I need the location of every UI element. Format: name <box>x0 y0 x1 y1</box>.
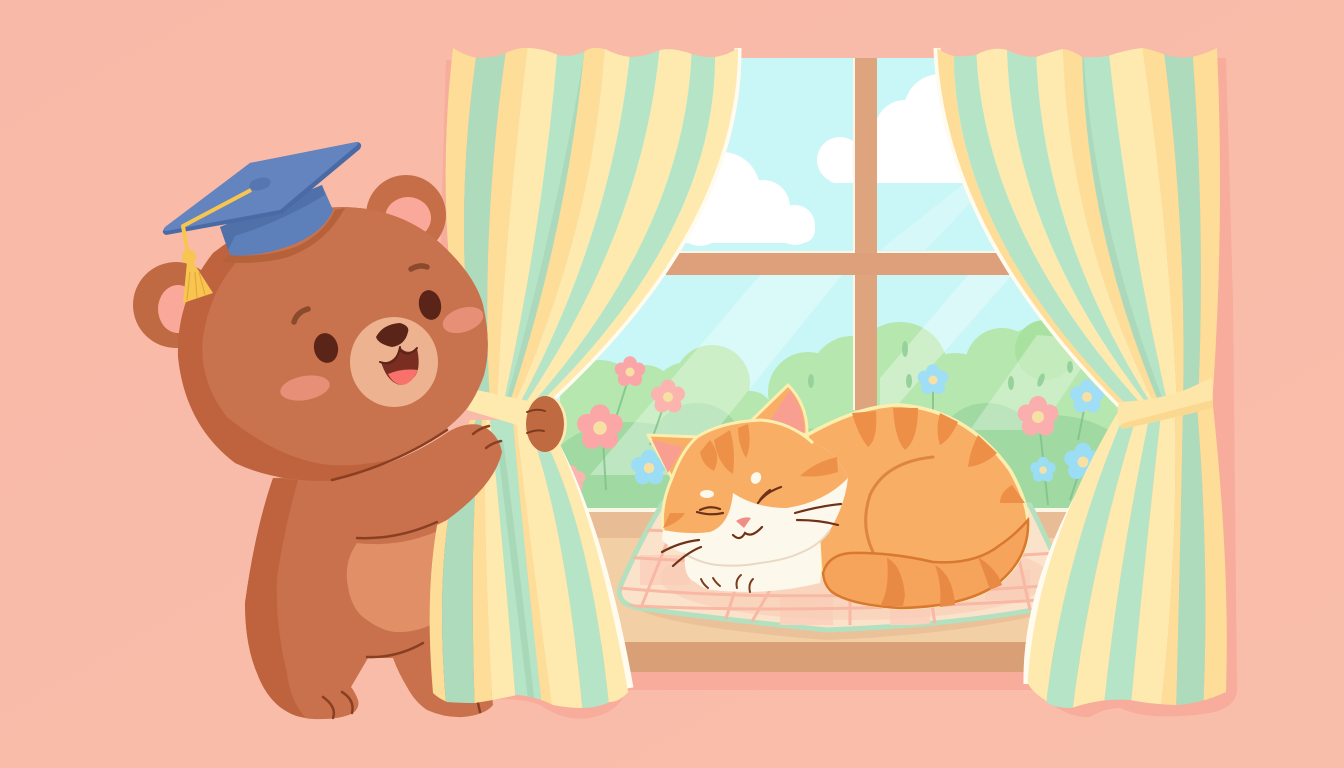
tassel <box>182 190 251 303</box>
cap base <box>220 185 333 256</box>
forehead spots <box>700 470 763 498</box>
right curtain lower <box>1027 405 1230 715</box>
arm <box>332 424 502 540</box>
cat eyes, nose, mouth, whiskers <box>662 487 841 566</box>
cat body <box>807 405 1028 608</box>
right ear <box>366 175 446 255</box>
head highlight <box>202 207 488 465</box>
tummy <box>347 530 440 632</box>
bush marks <box>808 341 1073 390</box>
cap shadow on head <box>222 208 345 263</box>
haunch line <box>866 457 933 552</box>
garden bushes <box>540 183 1135 525</box>
nose <box>376 323 408 347</box>
left curtain tie <box>467 390 533 428</box>
cheeks <box>278 302 487 404</box>
left curtain lower <box>428 420 632 715</box>
plaid cushion <box>615 503 1055 640</box>
paw on curtain tie <box>526 396 567 452</box>
flowers <box>557 356 1104 505</box>
muzzle <box>350 317 438 407</box>
mouth <box>380 347 419 385</box>
clouds <box>670 74 976 246</box>
head stripes <box>663 424 838 528</box>
leg line <box>367 643 423 657</box>
left curtain upper <box>446 44 738 405</box>
left ear <box>133 262 219 348</box>
orange mask <box>662 420 848 533</box>
eyebrows <box>294 266 427 322</box>
toe lines <box>323 692 480 718</box>
cat head <box>662 420 848 566</box>
eyes <box>311 288 444 365</box>
tail stripes <box>880 557 1002 607</box>
tail <box>823 520 1028 608</box>
light beams <box>590 275 842 475</box>
graduation cap <box>163 142 361 303</box>
button <box>248 175 272 193</box>
mortarboard <box>163 142 361 235</box>
sleeping cat <box>648 385 1028 608</box>
right curtain tie <box>1118 378 1213 429</box>
bear <box>133 142 567 540</box>
cat ears <box>648 435 700 478</box>
curtain and window shadows <box>439 58 1237 719</box>
bear body <box>245 470 493 719</box>
right curtain upper <box>937 44 1221 405</box>
head <box>178 207 488 481</box>
white chest and paws <box>685 540 821 592</box>
window <box>540 58 1135 525</box>
window sill <box>570 508 1080 672</box>
body stripes <box>852 408 1025 503</box>
sky <box>540 58 1130 510</box>
mullions <box>666 58 1011 410</box>
